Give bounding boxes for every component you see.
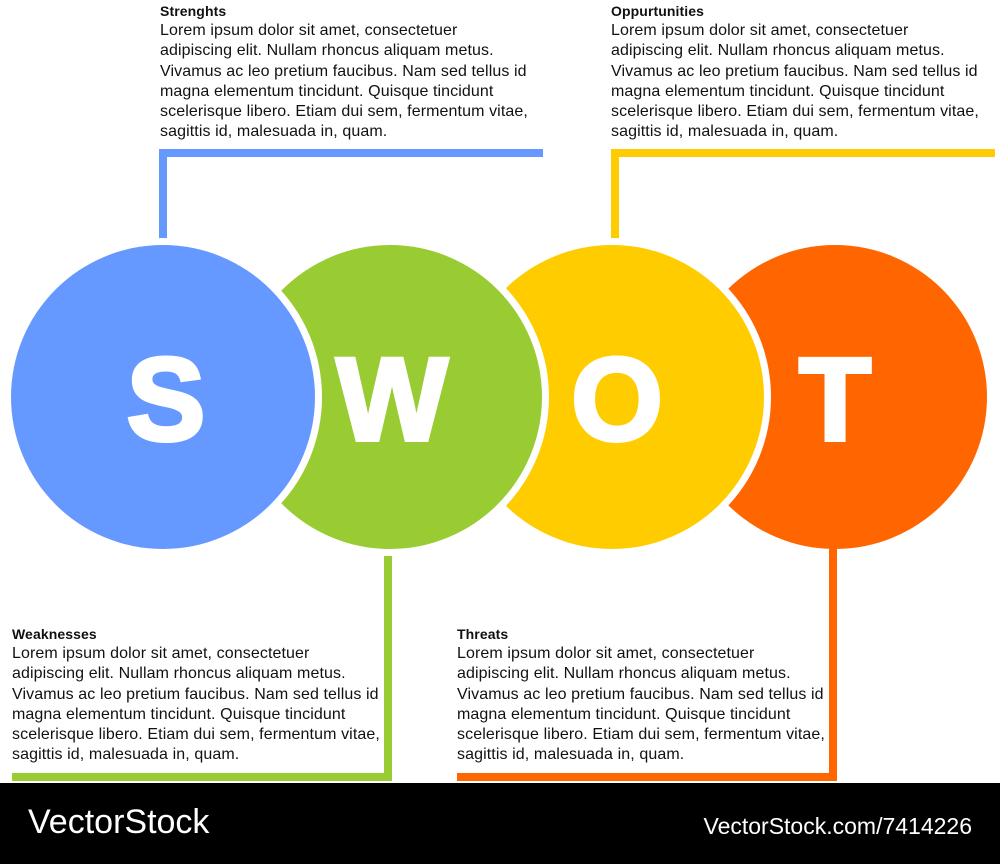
- text: weaknesses: scelerisque libero. Etiam dui sem, fermentum vitae,: [12, 726, 380, 743]
- footer logo: VectorStock: [28, 803, 209, 841]
- text: strengths: Vivamus ac leo pretium faucibus. Nam sed tellus id: [160, 63, 527, 80]
- text: strengths: Strenghts: [160, 3, 226, 19]
- connector: weaknesses: [12, 548, 388, 777]
- text: threats: sagittis id, malesuada in, quam.: [457, 746, 684, 763]
- circle T: T: [799, 334, 871, 466]
- text: threats: Threats: [457, 626, 508, 642]
- text: opportunities: Vivamus ac leo pretium faucibus. Nam sed tellus id: [611, 63, 978, 80]
- text: threats: adipiscing elit. Nullam rhoncus aliquam metus.: [457, 665, 791, 682]
- text: strengths: scelerisque libero. Etiam dui sem, fermentum vitae,: [160, 103, 528, 120]
- circle O: [453, 238, 771, 556]
- text: opportunities: scelerisque libero. Etiam dui sem, fermentum vitae,: [611, 103, 979, 120]
- connector: strengths: [163, 153, 543, 245]
- text: threats: magna elementum tincidunt. Quisque tincidunt: [457, 706, 790, 723]
- text: weaknesses: sagittis id, malesuada in, quam.: [12, 746, 239, 763]
- text: opportunities: [611, 3, 979, 140]
- circle S: S: [127, 334, 205, 466]
- text: weaknesses: Lorem ipsum dolor sit amet, consectetuer: [12, 645, 309, 662]
- text: weaknesses: adipiscing elit. Nullam rhoncus aliquam metus.: [12, 665, 346, 682]
- text: threats: [457, 626, 825, 763]
- text: strengths: [160, 3, 528, 140]
- text: strengths: adipiscing elit. Nullam rhoncus aliquam metus.: [160, 42, 494, 59]
- text: strengths: magna elementum tincidunt. Quisque tincidunt: [160, 83, 493, 100]
- connector: threats: [457, 548, 833, 777]
- text: strengths: Lorem ipsum dolor sit amet, consectetuer: [160, 22, 457, 39]
- text: threats: Lorem ipsum dolor sit amet, consectetuer: [457, 645, 754, 662]
- text: threats: Vivamus ac leo pretium faucibus. Nam sed tellus id: [457, 686, 824, 703]
- circle O: O: [571, 334, 663, 466]
- text: opportunities: Lorem ipsum dolor sit amet, consectetuer: [611, 22, 908, 39]
- text: opportunities: adipiscing elit. Nullam rhoncus aliquam metus.: [611, 42, 945, 59]
- circle S: [4, 238, 322, 556]
- footer bar: [0, 783, 1000, 864]
- connector: opportunities: [615, 153, 995, 245]
- footer url: VectorStock.com/7414226: [704, 813, 972, 839]
- text: weaknesses: Weaknesses: [12, 626, 97, 642]
- text: weaknesses: magna elementum tincidunt. Quisque tincidunt: [12, 706, 345, 723]
- text: threats: scelerisque libero. Etiam dui sem, fermentum vitae,: [457, 726, 825, 743]
- text: opportunities: sagittis id, malesuada in, quam.: [611, 123, 838, 140]
- text: weaknesses: Vivamus ac leo pretium faucibus. Nam sed tellus id: [12, 686, 379, 703]
- circle T: [683, 245, 987, 549]
- text: strengths: sagittis id, malesuada in, quam.: [160, 123, 387, 140]
- circle W: [231, 238, 549, 556]
- circle W: W: [336, 334, 448, 466]
- text: weaknesses: [12, 626, 380, 763]
- text: opportunities: Oppurtunities: [611, 3, 704, 19]
- text: opportunities: magna elementum tincidunt. Quisque tincidunt: [611, 83, 944, 100]
